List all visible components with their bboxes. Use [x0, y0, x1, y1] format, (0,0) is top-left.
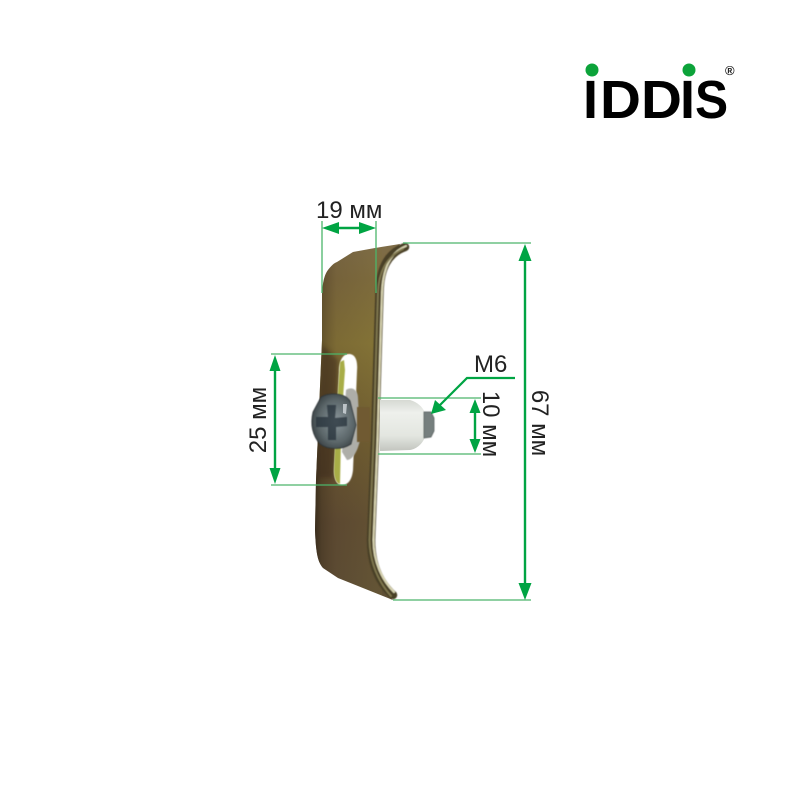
slot inner edge [334, 360, 345, 484]
washer [342, 388, 360, 460]
label: 67 мм [526, 390, 553, 456]
dimension: 19 mm [316, 197, 382, 293]
logo wordmark: D [600, 69, 641, 130]
slot [334, 354, 357, 485]
screw highlight [343, 404, 347, 414]
logo wordmark: I [583, 70, 598, 130]
extension lines [322, 221, 376, 293]
arrow [518, 244, 532, 600]
callout: M6 thread [431, 351, 515, 414]
product photo: mounting bracket [312, 240, 434, 605]
label: 10 мм [477, 391, 504, 457]
logo: IDDIS [583, 63, 735, 130]
logo wordmark [583, 69, 728, 130]
label: M6 [474, 351, 507, 378]
nut back tab [357, 407, 370, 442]
logo wordmark: S [695, 69, 728, 129]
bracket bent rim [370, 246, 406, 596]
arrow [322, 222, 376, 234]
logo dot left [586, 64, 598, 76]
arrow [470, 399, 480, 453]
extension lines [378, 398, 481, 454]
dimension: 25 mm [245, 354, 347, 485]
leader [438, 378, 515, 407]
logo wordmark: D [641, 69, 682, 130]
logo dot right [682, 64, 696, 76]
label: 19 мм [316, 197, 382, 224]
spacer [380, 400, 425, 451]
logo wordmark: I [680, 70, 695, 130]
bracket plate [315, 244, 400, 600]
label: 25 мм [245, 387, 272, 453]
screw head [312, 394, 356, 448]
registered mark: ® [725, 63, 735, 78]
arrowhead [431, 400, 446, 414]
extension lines [271, 354, 347, 485]
infographic canvas [249, 64, 734, 601]
screw cross [316, 405, 347, 440]
bracket shading [315, 249, 368, 582]
arrow [270, 355, 280, 484]
extension lines [393, 243, 531, 600]
dark strip left of slot [317, 345, 338, 478]
dimension: 10 mm [378, 391, 504, 457]
dimension: 67 mm [393, 243, 553, 600]
threaded end [424, 412, 434, 438]
